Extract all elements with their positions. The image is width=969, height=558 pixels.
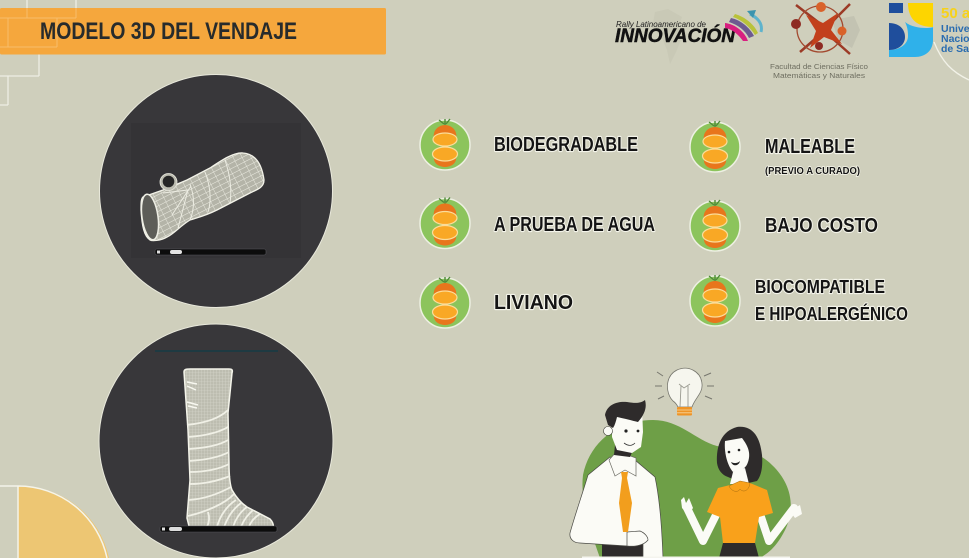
logo: 50 años Universidad Nacional de San Luis: Unive xyxy=(941,23,969,35)
decorative corner squares xyxy=(0,0,76,105)
feature: biocompatible e hipoalergenico: E HIPOALERGÉNICO xyxy=(755,303,908,324)
icon: orange xyxy=(690,200,740,251)
panel: bottom 3D model, leg cast xyxy=(99,324,333,558)
white base strip xyxy=(582,556,790,558)
feature: a prueba de agua xyxy=(420,198,655,248)
feature: bajo costo xyxy=(690,200,878,251)
feature: biodegradable xyxy=(420,119,638,170)
green blob xyxy=(582,420,791,558)
panel: top 3D model, arm cast xyxy=(100,74,332,308)
feature: a prueba de agua: A PRUEBA DE AGUA xyxy=(494,214,655,236)
arm bandage mesh xyxy=(139,153,264,241)
logo: Facultad de Ciencias xyxy=(770,2,868,80)
icon: orange xyxy=(690,275,740,326)
icon: light bulb xyxy=(655,368,714,416)
logo: Rally Latinoamericano de Innovación: Rally Latinoamericano de xyxy=(616,20,707,29)
feature: maleable: (PREVIO A CURADO) xyxy=(765,165,860,177)
feature: biocompatible e hipoalergenico: BIOCOMPATIBLE xyxy=(755,277,885,297)
viewer progress bar xyxy=(160,526,277,532)
logo: 50 años Universidad Nacional de San Luis: de Sa xyxy=(941,43,969,55)
logo: 50 años Universidad Nacional de San Luis: Nacio xyxy=(941,33,969,45)
man xyxy=(570,400,663,558)
icon: orange xyxy=(690,121,740,172)
feature: biodegradable: BIODEGRADABLE xyxy=(494,134,638,156)
feature: liviano: LIVIANO xyxy=(494,292,573,314)
icon: orange xyxy=(420,119,470,170)
illustration: two people with idea bulb xyxy=(570,368,802,558)
logo: Rally Latinoamericano de Innovación: INNOVACIÓN xyxy=(615,25,736,47)
feature: maleable: MALEABLE xyxy=(765,136,855,158)
feature: liviano xyxy=(420,277,573,328)
icon: orange xyxy=(420,198,470,248)
feature: maleable xyxy=(690,121,860,177)
icon: orange xyxy=(420,277,470,328)
woman xyxy=(681,427,802,558)
decorative quarter circle xyxy=(0,486,109,558)
logo: Rally Latinoamericano de Innovación xyxy=(615,9,761,64)
viewer progress bar xyxy=(155,249,266,255)
logo caption: Facultad de Ciencias Físico xyxy=(770,62,868,71)
feature: bajo costo: BAJO COSTO xyxy=(765,215,878,237)
title banner xyxy=(0,8,386,54)
feature: biocompatible e hipoalergenico xyxy=(690,275,908,326)
logo: Facultad de Ciencias: Matemáticas y Naturales xyxy=(773,71,865,80)
title: MODELO 3D DEL VENDAJE xyxy=(40,18,297,45)
logo: 50 años Universidad Nacional de San Luis xyxy=(889,3,969,80)
leg bandage mesh xyxy=(184,369,273,530)
